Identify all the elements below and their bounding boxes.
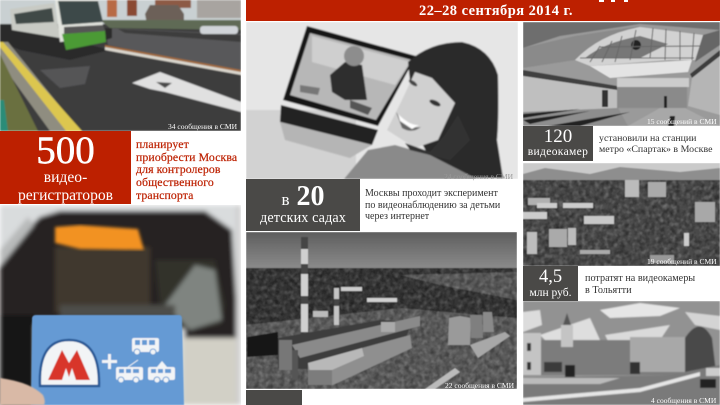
text: Москвы проходит эксперимент: через интернет [365, 211, 429, 222]
label: видео-регистраторов: регистраторов [18, 186, 113, 204]
caption: 15 сообщений в СМИ: 15 сообщений в СМИ [647, 117, 717, 126]
clipped title glyphs [599, 0, 628, 2]
icon: metro logo [40, 340, 99, 386]
text: установили на станции: установили на станции [599, 133, 696, 144]
text: планирует приобрести Москва [136, 137, 238, 202]
number: 120: 120 [544, 126, 572, 147]
label: млн руб.: млн руб. [530, 287, 571, 299]
text: Москвы проходит эксперимент: по видеонаблюдению за детьми [365, 200, 500, 211]
text: потратят на видеокамеры: потратят на видеокамеры [585, 273, 695, 284]
callout: clipped number 250 [246, 390, 302, 405]
text: планирует приобрести Москва: транспорта [136, 188, 193, 202]
photo: bus lane road with articulated bus [0, 0, 241, 131]
photo: historic street in Moscow [523, 301, 720, 405]
photo: blurred bus with orange destination sign [0, 205, 241, 405]
caption: 4 сообщения в СМИ: 4 сообщения в СМИ [651, 396, 716, 405]
header band with date [246, 0, 720, 21]
label: видеокамер: видеокамер [528, 146, 588, 158]
label: видео-регистраторов: видео- [44, 169, 87, 186]
icon: blue metro card [0, 314, 185, 405]
caption: 19 сообщений в СМИ: 19 сообщений в СМИ [647, 257, 717, 266]
label: детских садах: детских садах [260, 210, 346, 226]
photo: thermal power plant aerial view [246, 232, 517, 389]
text: установили на станции [599, 133, 712, 155]
photo: Spartak metro station hall [523, 22, 720, 126]
text: потратят на видеокамеры [585, 273, 695, 296]
photo: woman and baby on a laptop screen [246, 22, 518, 179]
icon: tram [148, 361, 175, 383]
icon: bus [132, 338, 159, 355]
text: Москвы проходит эксперимент [365, 188, 500, 222]
photo: finger holding the card [0, 378, 45, 405]
text: планирует приобрести Москва: приобрести Москва [136, 150, 237, 164]
text: планирует приобрести Москва: общественного [136, 175, 214, 189]
icon: trolleybus [116, 360, 143, 383]
caption: 34 сообщения в СМИ: 34 сообщения в СМИ [168, 122, 237, 131]
text: потратят на видеокамеры: в Тольятти [585, 285, 632, 296]
callout: 500 видеорегистраторов [0, 131, 131, 204]
photo: Togliatti cityscape [523, 163, 720, 266]
number: в 20: в 20 [281, 181, 325, 212]
text: планирует приобрести Москва: для контролеров [136, 162, 221, 176]
text: планирует приобрести Москва: планирует [136, 137, 189, 151]
caption: 22 сообщения в СМИ: 22 сообщения в СМИ [445, 381, 514, 390]
date: 22–28 сентября 2014 г.: 22–28 сентября 2014 г. [419, 3, 573, 19]
callout: в 20 детских садах [246, 179, 360, 231]
text: Москвы проходит эксперимент: Москвы проходит эксперимент [365, 188, 498, 199]
text: установили на станции: метро «Спартак» в Москве [599, 144, 712, 155]
label: видео-регистраторов [18, 169, 113, 204]
number: 4,5: 4,5 [539, 267, 562, 287]
caption: 24 сообщения в СМИ: 24 сообщения в СМИ [444, 172, 513, 181]
callout: 120 видеокамер [523, 126, 593, 161]
callout: 4,5 млн руб. [523, 266, 578, 301]
